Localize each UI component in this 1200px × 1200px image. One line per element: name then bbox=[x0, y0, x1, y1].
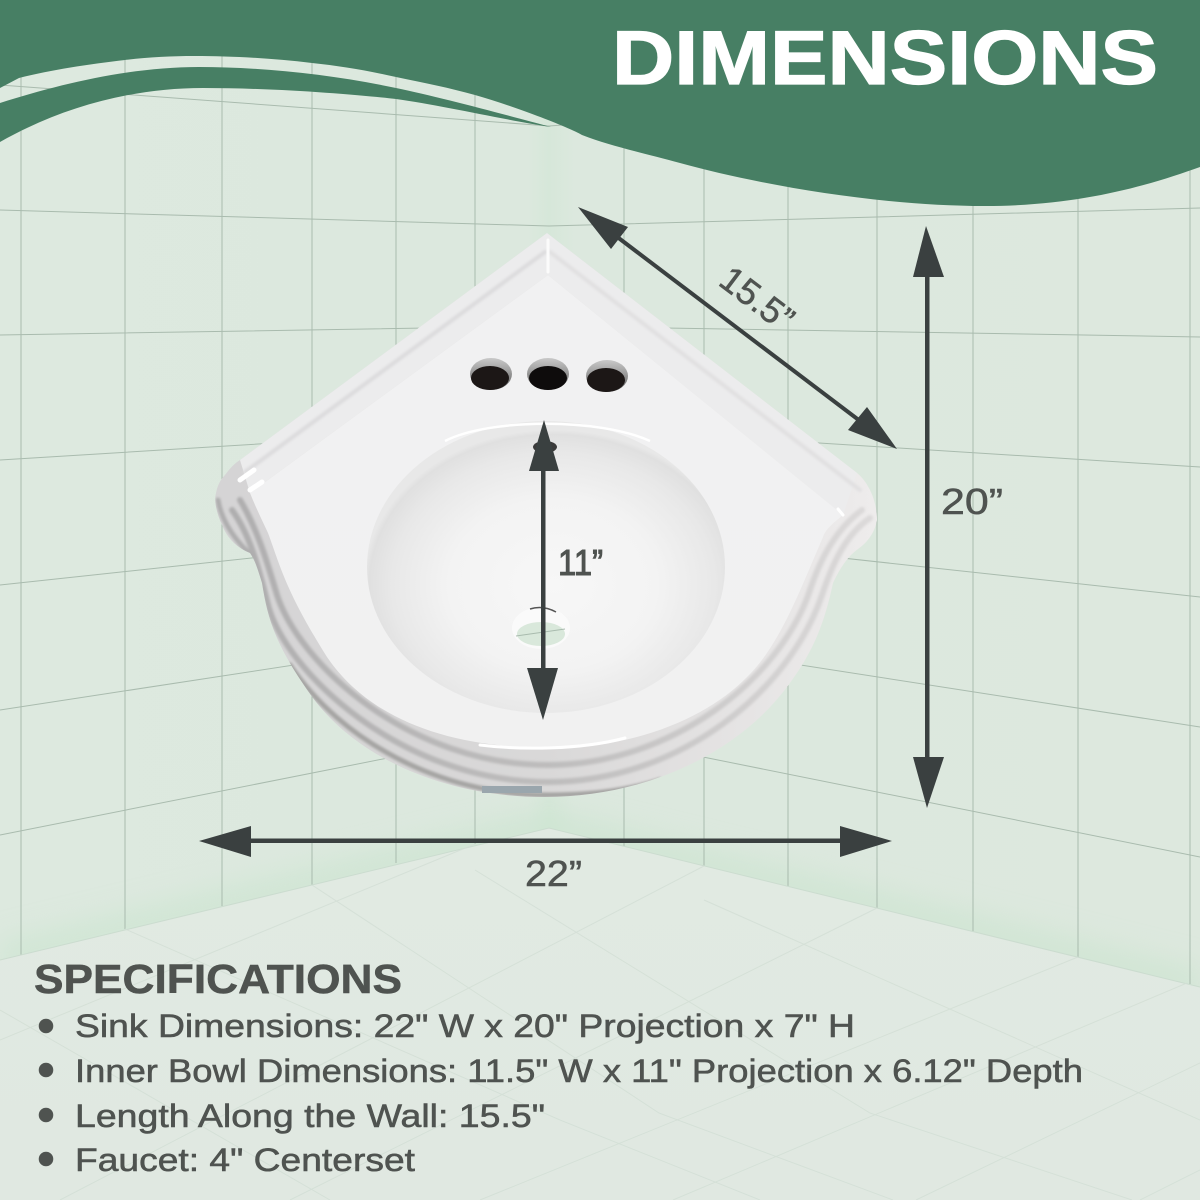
sink body bbox=[215, 233, 877, 797]
spec: sink dimensions: Sink Dimensions: 22" W x 20" Projection x 7" H bbox=[75, 1008, 855, 1044]
specifications heading: SPECIFICATIONS bbox=[34, 956, 402, 1002]
glaze highlights bbox=[240, 240, 843, 748]
header wave bbox=[0, 0, 1200, 206]
label: 22 inch: 22” bbox=[525, 853, 582, 894]
label: 11 inch: 11” bbox=[558, 542, 603, 583]
spec: length along the wall: Length Along the Wall: 15.5" bbox=[75, 1098, 545, 1134]
arrow: 11 inch inner bowl bbox=[527, 420, 559, 720]
rim ridges bbox=[218, 252, 870, 795]
spec: faucet: Faucet: 4" Centerset bbox=[75, 1142, 415, 1178]
arrow: 20 inch vertical bbox=[913, 226, 944, 808]
spec: inner bowl dimensions: Inner Bowl Dimensions: 11.5" W x 11" Projection x 6.12" Depth bbox=[75, 1053, 1083, 1089]
title: DIMENSIONS bbox=[612, 16, 1158, 101]
flat deck bbox=[250, 275, 843, 748]
arrow: 22 inch horizontal bbox=[199, 826, 892, 857]
drain bbox=[512, 607, 570, 649]
label: 15.5 inch: 15.5” bbox=[712, 258, 802, 340]
logo tag bbox=[482, 786, 542, 793]
label: 20 inch: 20” bbox=[941, 481, 1003, 522]
corner sink bbox=[215, 233, 877, 797]
overflow hole bbox=[533, 441, 557, 453]
specifications list bbox=[39, 1008, 1083, 1178]
inner bowl bbox=[367, 421, 725, 713]
faucet holes bbox=[470, 358, 628, 392]
top rim band bbox=[240, 233, 857, 515]
arrow: 15.5 inch diagonal bbox=[578, 207, 897, 449]
